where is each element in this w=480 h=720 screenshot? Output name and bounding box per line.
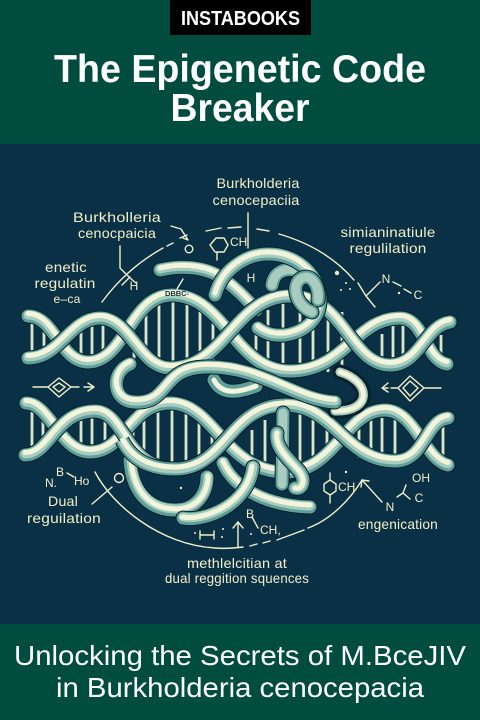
panel: footer band <box>0 624 480 720</box>
label: burkholleria left: cenocpaicia <box>78 225 156 241</box>
label: engenication: engenication <box>358 516 438 532</box>
dna strand: upper helix back <box>28 292 447 371</box>
dna strand: upper helix front <box>28 294 450 368</box>
subtitle: in Burkholderia cenocepacia <box>56 672 424 703</box>
icon: bottom centre symbols: B <box>246 507 254 521</box>
subtitle: Unlocking the Secrets of M.BceJIV <box>14 640 466 671</box>
title: The Epigenetic Code <box>54 48 426 91</box>
label: methylation caption <box>165 555 309 586</box>
title <box>54 48 426 130</box>
icon: left diamond arrow <box>33 378 94 397</box>
icon: lower left molecule: B <box>56 465 64 479</box>
label: dual reguilation <box>27 493 101 526</box>
icon: lower right molecule: N <box>386 500 394 514</box>
label: burkholderia top: cenocepaciia <box>212 192 300 208</box>
label: methylation caption: methlelcitian at <box>187 555 287 571</box>
icon: bottom centre symbols <box>180 487 281 547</box>
label: enetic regulatin: regulatin <box>34 275 96 291</box>
label: simianinatiule regulilation <box>340 224 436 256</box>
base pairs: upper helix <box>32 294 441 372</box>
icon: top centre connector <box>247 213 249 248</box>
brand badge <box>170 0 311 35</box>
bottom dashed arc <box>95 472 362 548</box>
title: Breaker <box>170 87 310 130</box>
top worm <box>160 265 256 310</box>
icon: left bond with H: H <box>130 279 138 293</box>
icon: right diamond arrow <box>382 376 441 401</box>
label: methylation caption: dual reggition squences <box>165 570 309 586</box>
label: enetic regulatin: enetic <box>45 259 87 275</box>
lower tangled loops <box>122 403 310 519</box>
icon: right molecule N C: N <box>382 272 390 286</box>
icon: bottom centre symbols: CH, <box>260 523 281 537</box>
vertical worm <box>277 413 303 488</box>
dna strand: lower helix back <box>26 400 448 472</box>
knot loops and arch <box>215 252 320 335</box>
base pairs: lower helix <box>32 400 443 470</box>
panel: header band <box>0 0 480 144</box>
label: simianinatiule regulilation: simianinatiule <box>340 224 436 240</box>
icon: top molecule: CH <box>230 235 247 249</box>
icon: lower right molecule <box>361 471 430 514</box>
icon: lower left molecule: Ho <box>74 474 90 488</box>
icon: lower left molecule: N. <box>45 476 57 490</box>
label: enetic regulatin <box>34 259 96 306</box>
icon: lower right molecule: C <box>415 491 424 505</box>
icon: right molecule N C: C <box>414 288 423 302</box>
icon: lower left molecule <box>45 465 124 504</box>
icon: lower right hexagon <box>324 471 355 503</box>
subtitle <box>14 640 466 703</box>
brand badge: INSTABOOKS <box>181 8 300 30</box>
top dashed arc <box>102 227 354 302</box>
panel: illustration background <box>0 144 480 624</box>
label: enetic regulatin: e–ca <box>54 292 81 306</box>
icon: lower right molecule: OH <box>412 471 430 485</box>
icon: right molecule N C <box>335 271 423 307</box>
strand label: DBBC- <box>165 291 190 298</box>
icon: top molecule <box>171 226 247 260</box>
dna strand: lower helix front <box>25 402 448 469</box>
label: dual reguilation: reguilation <box>27 510 101 526</box>
label: burkholleria left: Burkholleria <box>73 209 161 225</box>
icon: strand pointer <box>177 279 183 289</box>
label: burkholderia top: Burkholderia <box>216 175 300 191</box>
label: simianinatiule regulilation: regulilation <box>350 240 426 256</box>
label: burkholderia top <box>212 175 300 208</box>
label: burkholleria left <box>73 209 161 241</box>
icon: mid H: H <box>247 271 255 285</box>
label: dual reguilation: Dual <box>48 493 78 509</box>
middle tangled band <box>116 362 363 411</box>
icon: left bond with H <box>120 246 138 293</box>
icon: lower right hexagon: CH <box>338 480 355 494</box>
